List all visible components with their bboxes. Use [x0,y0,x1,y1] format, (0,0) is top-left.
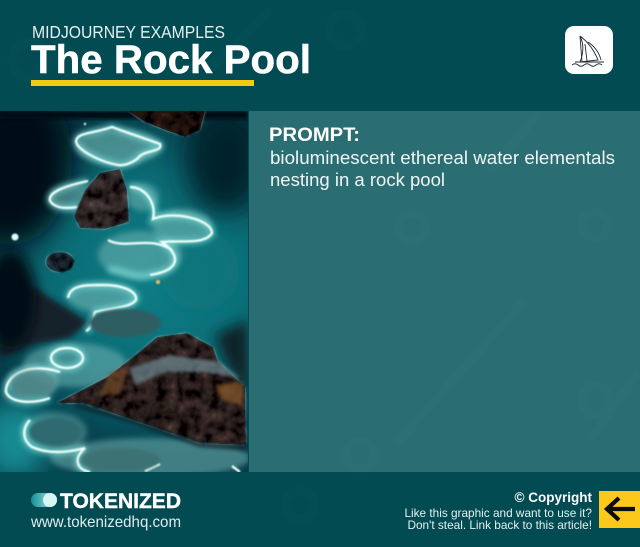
prompt text: bioluminescent ethereal water elementals [270,148,615,168]
eyebrow text: MIDJOURNEY EXAMPLES [32,22,225,42]
title underline [31,80,254,86]
right dark edge [215,320,248,395]
prompt text: nesting in a rock pool [270,170,445,190]
upper rock [128,111,205,137]
icon: Midjourney sailboat [565,26,613,74]
panel watermark [346,112,640,469]
small rock [46,252,74,272]
glowing ring halos [6,127,212,472]
icon: yellow arrow box [599,491,640,528]
panel: prompt [249,111,640,472]
central rock [74,169,129,229]
copyright notice: © Copyright [515,490,592,505]
copyright notice [404,490,592,532]
glowing ring cores [6,127,240,472]
logo mark [31,493,57,507]
prompt heading: PROMPT: [269,124,360,146]
pale shallow water [6,129,250,478]
speck lights [12,123,86,240]
panel: photo of glowing rock pool [0,111,248,472]
light teal lower water [0,400,50,480]
title: The Rock Pool [31,38,311,82]
copyright notice: Like this graphic and want to use it? [404,506,592,520]
submerged stones [89,309,161,337]
watermark pattern [12,10,361,519]
prompt text [270,148,615,190]
header [31,22,311,86]
copyright notice: Don't steal. Link back to this article! [407,518,592,532]
logo wordmark: TOKENIZED [60,490,181,513]
left dark bank [0,285,88,358]
footer logo [30,490,181,531]
website: www.tokenizedhq.com [30,514,181,531]
dark upper-left water [0,75,72,245]
large rock [57,333,246,445]
